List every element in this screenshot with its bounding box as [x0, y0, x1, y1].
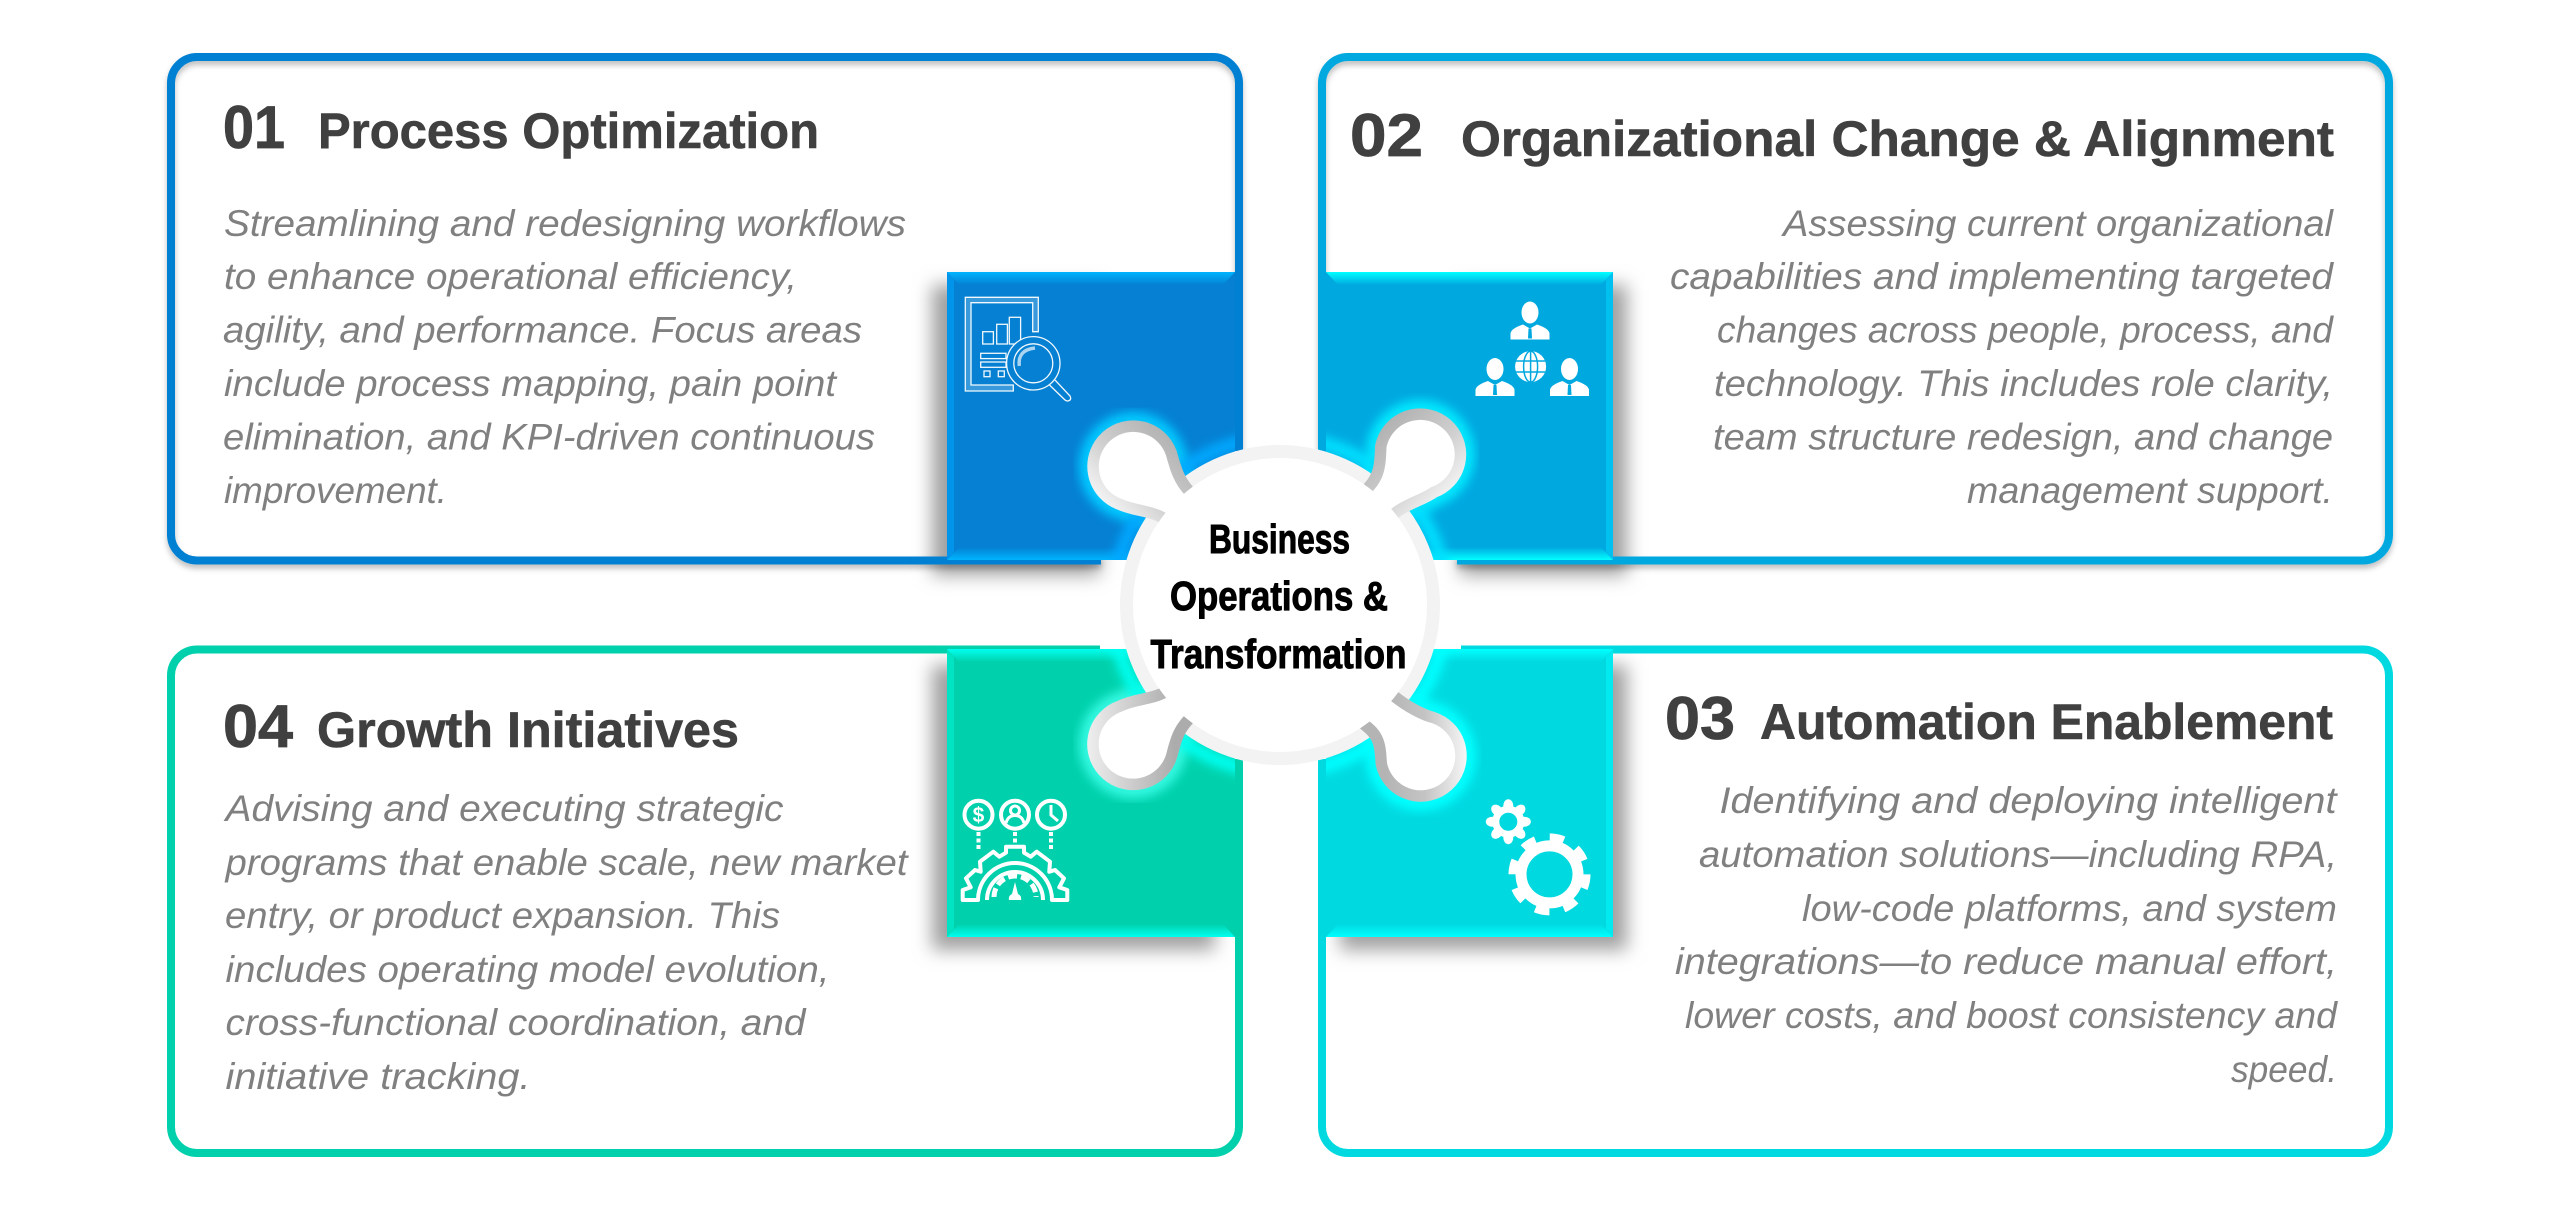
body text: programs that enable scale, new market	[224, 842, 909, 883]
heading: 03	[1665, 685, 1735, 752]
body text: management support.	[1967, 470, 2333, 511]
body text: speed.	[2231, 1049, 2337, 1090]
body text	[1675, 780, 2338, 1090]
panel outline	[1322, 650, 2389, 1153]
body text	[1670, 203, 2335, 511]
body text	[223, 203, 906, 511]
block drop shadows	[932, 285, 1627, 950]
body text: low-code platforms, and system	[1802, 888, 2337, 929]
body text: cross-functional coordination, and	[226, 1002, 807, 1043]
center title: Operations &	[1170, 573, 1388, 619]
body text: automation solutions—including RPA,	[1699, 834, 2337, 875]
body text: changes across people, process, and	[1717, 310, 2334, 350]
body text: initiative tracking.	[226, 1056, 530, 1097]
body text: lower costs, and boost consistency and	[1685, 995, 2338, 1036]
heading: Process Optimization	[318, 103, 819, 159]
center title: Business	[1209, 516, 1350, 562]
panel: 02 Organizational Change & Alignment	[1322, 57, 2389, 560]
heading: 02	[1350, 102, 1423, 169]
icon: report with magnifier	[965, 297, 1071, 401]
panel outline	[1322, 57, 2389, 560]
icon: gears	[1486, 799, 1586, 910]
body text: capabilities and implementing targeted	[1670, 256, 2334, 297]
body text: team structure redesign, and change	[1713, 416, 2333, 458]
body text	[223, 788, 909, 1097]
icon: people around a globe	[1476, 302, 1589, 396]
panel: 04 Growth Initiatives	[171, 650, 1239, 1153]
icon: KPI gauge gear	[963, 801, 1067, 900]
body text: integrations—to reduce manual effort,	[1675, 941, 2337, 982]
panel outline	[171, 57, 1239, 560]
puzzle block: top-left blue	[947, 272, 1235, 560]
panel: 01 Process Optimization	[171, 57, 1239, 560]
body text: includes operating model evolution,	[226, 949, 830, 990]
icon: KPI gauge gear: $	[973, 804, 985, 827]
puzzle knob: top-left	[1099, 432, 1184, 513]
center title: Transformation	[1150, 631, 1406, 677]
body text: Advising and executing strategic	[223, 788, 784, 829]
puzzle knob: bottom-left	[1099, 698, 1184, 779]
body text: Streamlining and redesigning workflows	[224, 203, 906, 244]
puzzle block: bottom-left green	[947, 649, 1235, 937]
body text: Assessing current organizational	[1781, 203, 2335, 244]
body text: improvement.	[224, 470, 447, 511]
puzzle knob: top-right	[1373, 420, 1455, 509]
body text: include process mapping, pain point	[224, 363, 838, 404]
heading: 04	[223, 693, 294, 760]
body text: entry, or product expansion. This	[225, 895, 780, 936]
heading: Growth Initiatives	[317, 702, 739, 758]
body text: elimination, and KPI-driven continuous	[223, 416, 875, 458]
puzzle block: top-right light blue	[1326, 272, 1613, 560]
heading: 01	[223, 94, 285, 161]
body text: to enhance operational efficiency,	[224, 256, 797, 297]
puzzle knob: bottom-right	[1369, 701, 1455, 790]
puzzle block: bottom-right cyan	[1326, 649, 1613, 937]
body text: technology. This includes role clarity,	[1714, 363, 2333, 404]
heading	[223, 94, 819, 161]
heading	[223, 693, 739, 760]
body text: Identifying and deploying intelligent	[1720, 780, 2338, 821]
center title	[1150, 516, 1406, 677]
panel: 03 Automation Enablement	[1322, 650, 2389, 1153]
body text: agility, and performance. Focus areas	[223, 310, 862, 350]
panel outline	[171, 650, 1239, 1153]
heading: Automation Enablement	[1760, 694, 2333, 750]
center hub: Business Operations & Transformation	[1099, 420, 1455, 790]
heading: Organizational Change & Alignment	[1461, 111, 2334, 167]
